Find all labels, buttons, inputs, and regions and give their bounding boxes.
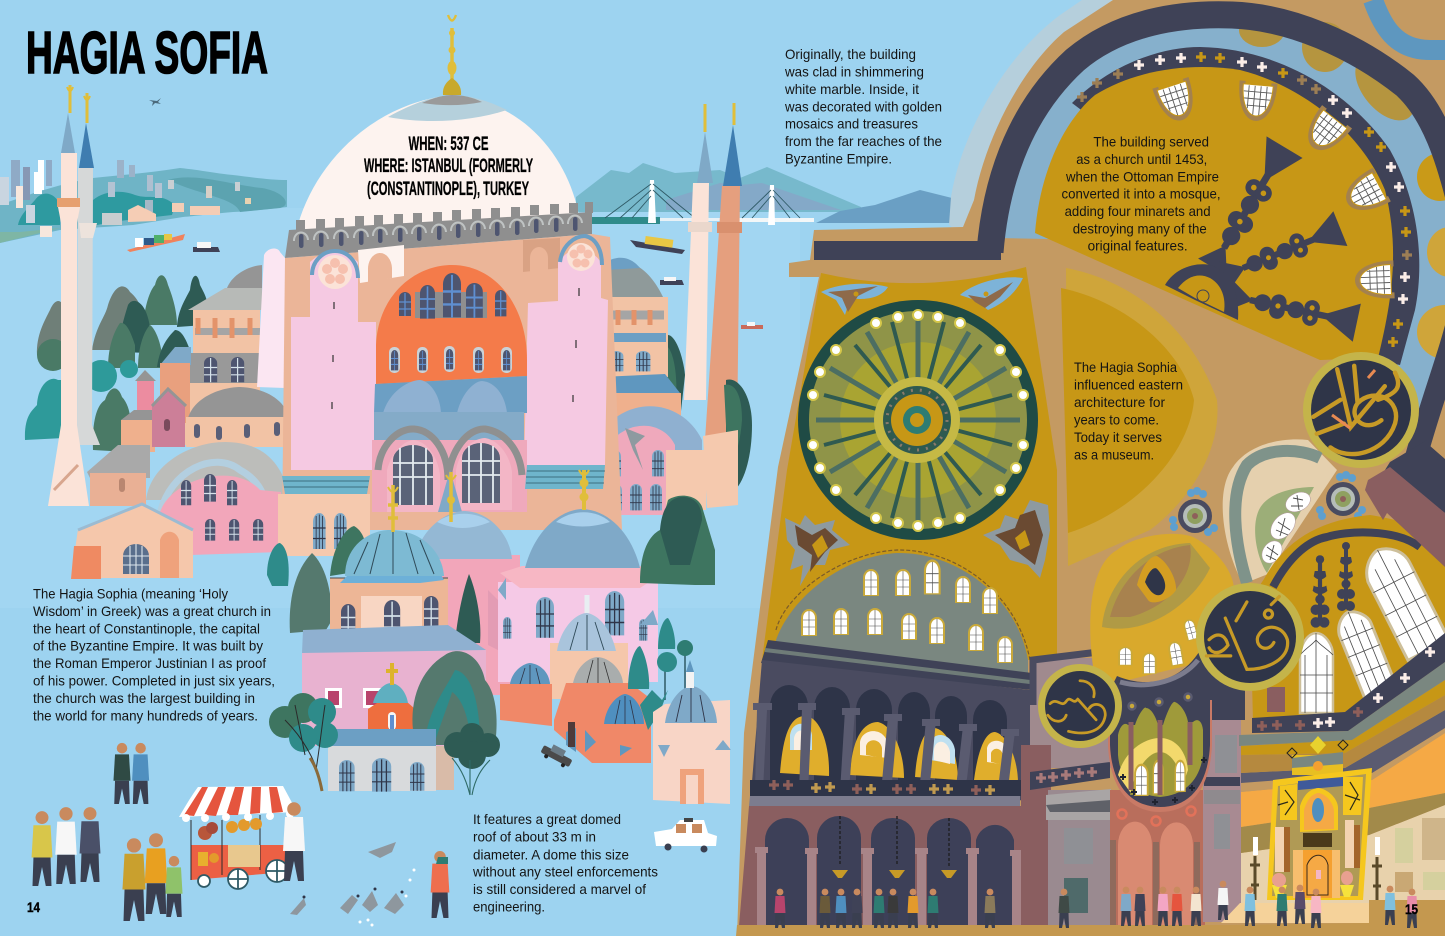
upper right gold apse — [1250, 515, 1445, 722]
text block: introduction: the Roman Emperor Justinian I as proof — [33, 656, 266, 671]
text block: introduction: the world for many hundreds of years. — [33, 708, 258, 723]
small gabled house — [71, 503, 193, 579]
ships — [127, 234, 763, 329]
blue bands — [374, 376, 527, 448]
opening dark base and grey strip — [1110, 645, 1245, 720]
dome centre medallion — [874, 377, 960, 463]
couple walking — [113, 743, 149, 804]
text block: dome: roof of about 33 m in — [473, 830, 596, 845]
trees beside minaret — [664, 335, 752, 490]
text block: dome: without any steel enforcements — [472, 865, 658, 880]
boy — [431, 851, 449, 918]
small gold half dome — [1090, 534, 1234, 682]
text block: marble: from the far reaches of the — [785, 134, 942, 149]
right big blue dome building — [488, 470, 660, 682]
when and where — [364, 134, 533, 200]
pale blue rear dome — [415, 472, 520, 695]
family at cart — [122, 833, 183, 921]
main building facade — [257, 234, 622, 530]
seraphim wing motifs — [785, 500, 1050, 586]
interior: gold scallops on right — [1417, 153, 1445, 359]
text block: marble — [784, 47, 942, 167]
mihrab — [1221, 736, 1372, 923]
dark cypress — [455, 574, 480, 643]
small domes cluster — [500, 595, 651, 763]
foreground trees — [269, 693, 500, 795]
gallery yellow windows — [780, 716, 1018, 783]
interior: tan wall — [737, 0, 1445, 936]
peach hall with arched windows — [278, 494, 370, 556]
gallery columns — [753, 703, 1019, 797]
text block: influence: architecture for — [1074, 395, 1165, 410]
text block: mosque conversion — [1062, 134, 1220, 254]
minaret: front — [684, 104, 713, 400]
main dome — [296, 15, 579, 232]
minaret: rear — [705, 103, 742, 440]
big blob tree — [412, 651, 497, 745]
interior: blue band — [996, 27, 1445, 440]
beaded band crosses — [1077, 52, 1412, 347]
icon: aeroplane — [149, 98, 161, 106]
orange chapel — [368, 663, 415, 742]
text block: marble: was clad in shimmering — [784, 65, 924, 80]
mauve gabled house — [152, 389, 186, 447]
interior: beaded band background — [1072, 47, 1419, 365]
text block: marble: white marble. Inside, it — [784, 82, 919, 97]
interior: pale outer band — [949, 0, 1445, 260]
cart wheels — [198, 860, 288, 889]
text block: mosque conversion: adding four minarets and — [1065, 204, 1211, 219]
calligraphy medallion: right — [1303, 352, 1419, 468]
left wing of the main building — [160, 265, 262, 445]
pigeons — [290, 842, 404, 915]
ground floor arcade — [739, 806, 1025, 926]
birds and boy feeding pigeons — [290, 842, 449, 926]
text block: mosque conversion: converted it into a mosque, — [1062, 187, 1220, 202]
minaret: rear — [77, 93, 100, 445]
pink tower — [121, 370, 156, 452]
text block: introduction: the heart of Constantinople, the capital — [33, 621, 260, 636]
half dome with windows — [776, 550, 1030, 680]
peach domed pavilion — [653, 660, 731, 804]
text block: marble: Byzantine Empire. — [785, 152, 892, 167]
elliptical opening — [1108, 694, 1212, 812]
interior: gold half dome — [1035, 67, 1393, 360]
hanging lamps — [832, 816, 957, 878]
floral chains — [1311, 542, 1355, 628]
calligraphy medallion: left — [1038, 664, 1122, 748]
right lower bands — [1239, 633, 1445, 905]
teal dome building — [330, 485, 448, 648]
trees behind left wing — [25, 275, 208, 452]
visitors at floor level — [774, 881, 1418, 928]
pink lower wing — [302, 625, 486, 746]
tree right of dome — [640, 496, 715, 585]
text block: influence: Today it serves — [1074, 430, 1162, 445]
text block: marble: Originally, the building — [785, 47, 916, 62]
right pier — [1203, 717, 1241, 922]
left minarets — [48, 85, 100, 506]
candlesticks — [1250, 837, 1382, 912]
text block: mosque conversion: as a church until 1453, — [1076, 152, 1207, 167]
half dome windows — [1152, 77, 1395, 300]
interior: dark horizontal bar — [814, 241, 1001, 260]
text block: influence: years to come. — [1074, 413, 1159, 428]
text block: influence — [1074, 360, 1183, 463]
title: HAGIA SOFIA — [26, 20, 268, 86]
striped blue roofs — [282, 465, 605, 494]
right wing of the main building — [597, 258, 706, 515]
suspension bridge — [592, 180, 814, 225]
when and where: WHEN: 537 CE — [408, 134, 488, 155]
half dome floral rays — [1194, 136, 1361, 342]
peach domed hall — [186, 387, 290, 447]
grey-white lower building — [328, 729, 454, 792]
interior: gold scallops on blue band — [1239, 13, 1426, 131]
vendor — [283, 802, 305, 881]
half dome hub — [1165, 264, 1238, 320]
text block: dome: diameter. A dome this size — [473, 847, 629, 862]
text block: mosque conversion: destroying many of the — [1073, 221, 1207, 236]
trees in middle — [267, 526, 368, 633]
distant mountains — [576, 163, 952, 223]
distant city skyline — [0, 160, 287, 243]
orange arch with windows — [376, 265, 527, 384]
black car on road — [539, 741, 575, 770]
text block: mosque conversion: The building served — [1093, 134, 1209, 149]
text block: dome: It features a great domed — [473, 812, 621, 827]
rosettes — [1169, 471, 1366, 536]
text block: influence: The Hagia Sophia — [1074, 360, 1177, 375]
arched windows — [1300, 540, 1445, 713]
when and where: WHERE: ISTANBUL (FORMERLY — [364, 156, 533, 177]
page number 14: 14 — [27, 899, 40, 915]
pink lower arches — [372, 429, 527, 512]
text block: influence: influenced eastern — [1074, 378, 1183, 393]
gallery — [749, 640, 1032, 806]
grey house — [87, 445, 150, 506]
page number 15: 15 — [1405, 901, 1418, 917]
text block: mosque conversion: when the Ottoman Empire — [1065, 169, 1219, 184]
gallery balustrade — [750, 780, 1032, 796]
icon: gold finial — [443, 15, 461, 95]
text block: introduction: the church was the largest building in — [33, 691, 255, 706]
text block: introduction — [33, 586, 275, 723]
corner dark and mauve bands — [1365, 440, 1445, 567]
white car — [654, 818, 717, 852]
text block: introduction: The Hagia Sophia (meaning ‘Holy — [33, 586, 228, 602]
interior: upper right blue arc — [1373, 0, 1445, 50]
text block: introduction: Wisdom’ in Greek) was a great church in — [33, 604, 271, 619]
text block: mosque conversion: original features. — [1088, 239, 1188, 254]
food cart — [179, 786, 305, 889]
ornaments: butterfly motifs — [821, 277, 1023, 315]
grey dome with pink hall — [146, 442, 290, 556]
pendentive gold panel — [762, 267, 1057, 660]
calligraphy medallion: centre — [1196, 583, 1304, 691]
coral arch wall — [1110, 790, 1205, 926]
text block: dome: is still considered a marvel of — [473, 882, 646, 897]
text block: influence: as a museum. — [1074, 448, 1154, 463]
text block: marble: mosaics and treasures — [785, 117, 918, 132]
shell niche with windows — [1223, 439, 1337, 584]
text block: marble: was decorated with golden — [784, 99, 942, 114]
big circular dome window — [798, 300, 1038, 540]
text block: introduction: of the Byzantine Empire. It was built by — [33, 639, 263, 654]
right pink tower — [524, 236, 608, 465]
central piers — [1021, 650, 1241, 926]
minaret: front — [48, 85, 89, 506]
text block: dome: engineering. — [473, 899, 545, 914]
left pink tower — [291, 251, 376, 470]
three men walking — [32, 807, 100, 886]
small teal shrubs and palms — [628, 618, 693, 730]
low buildings on the left — [71, 370, 290, 579]
text block: dome — [472, 812, 658, 914]
pale gold apse — [1061, 268, 1218, 566]
floor — [736, 900, 1445, 936]
text block: introduction: of his power. Completed in just six years, — [33, 674, 275, 689]
right minarets — [664, 103, 752, 508]
when and where: (CONSTANTINOPLE), TURKEY — [367, 179, 529, 200]
gallery arches — [770, 685, 1007, 790]
interior: dark arch — [990, 15, 1445, 478]
drum with crenellations — [285, 202, 593, 258]
